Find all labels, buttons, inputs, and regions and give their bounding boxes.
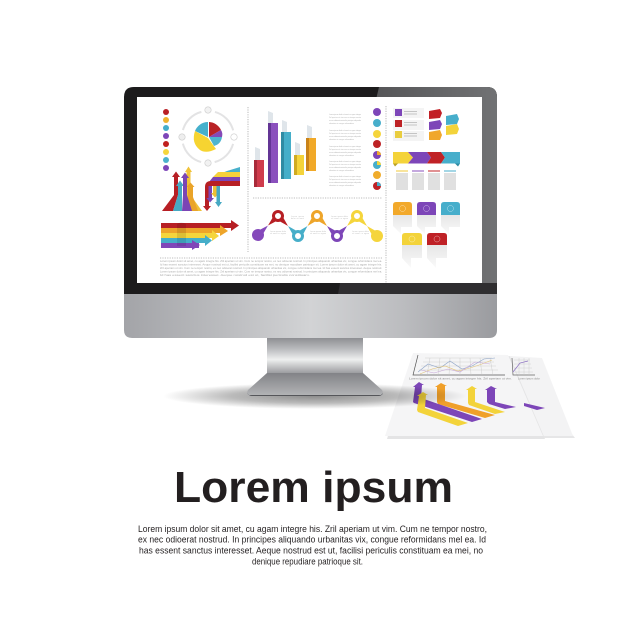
left colour dots bbox=[163, 109, 169, 171]
wave labels: Lorem ipsum dolor bbox=[270, 231, 286, 233]
body text: ex nec odioerat nostrud. In principes aliquando urbanitas vix, congue reformidans mel ea. Id bbox=[138, 534, 486, 544]
title: Lorem ipsum bbox=[174, 463, 453, 512]
monitor bezel bbox=[124, 87, 497, 294]
screen bbox=[137, 97, 482, 283]
legend rows with squares bbox=[393, 108, 424, 141]
footer paragraph on screen: Id has essent sanctus interesset. Aeque nostrud est ut, facilisi periculis constituam. bbox=[160, 274, 311, 277]
paragraph column: ex nec odioerat nostrud in principes aliquando bbox=[329, 135, 361, 138]
blue card bbox=[441, 202, 460, 234]
wave labels: dolor sit amet bbox=[291, 217, 304, 220]
wave labels bbox=[270, 216, 370, 235]
wave labels: sit amet cu agam bbox=[270, 232, 286, 235]
paragraph column: Lorem ipsum dolor sit amet cu agam integre bbox=[329, 145, 361, 148]
paragraph column: Lorem ipsum dolor sit amet cu agam integre bbox=[329, 129, 361, 132]
paragraph column: Zril aperiam ut vim cum ne tempor nostro bbox=[329, 163, 361, 166]
paragraph column: Lorem ipsum dolor sit amet cu agam integre bbox=[329, 175, 361, 178]
wave labels: Lorem ipsum dolor bbox=[331, 216, 348, 218]
paragraph column bbox=[329, 113, 361, 187]
bezel glare bbox=[330, 87, 497, 294]
front paper bbox=[385, 353, 543, 436]
body text: Lorem ipsum dolor sit amet, cu agam integre his. Zril aperiam ut vim. Cum ne tempor nostro, bbox=[138, 524, 487, 534]
line chart bbox=[413, 355, 505, 375]
paragraph column: Zril aperiam ut vim cum ne tempor nostro bbox=[329, 148, 361, 151]
wave labels: sit amet cu agam bbox=[352, 232, 370, 235]
rising arrows bbox=[162, 166, 202, 211]
wave labels: sit amet cu agam bbox=[310, 232, 326, 235]
wave labels: sit amet cu agam bbox=[331, 217, 348, 220]
paragraph column: ex nec odioerat nostrud in principes aliquando bbox=[329, 181, 361, 184]
pie chart with ring bbox=[179, 107, 237, 166]
silver chin bbox=[124, 294, 497, 338]
paragraph column: urbanitas vix congue reformidans bbox=[329, 169, 354, 172]
wave labels: Lorem ipsum dolor bbox=[310, 231, 326, 233]
footer paragraph on screen: Zril aperiam ut vim. Cum ne tempor nostro, ex nec odioerat nostrud. In principes aliquando urbanitas vix, congue reformidans mel ea. Id has essent sanctus interesset. Aeque nostrud. bbox=[160, 267, 382, 270]
callout cards bbox=[393, 202, 460, 268]
wave timeline bbox=[252, 212, 383, 242]
bar 5 bbox=[306, 125, 316, 171]
paragraph column: urbanitas vix congue reformidans bbox=[329, 154, 354, 157]
monitor stand bbox=[247, 338, 383, 396]
body text bbox=[138, 524, 487, 566]
bar 1 bbox=[254, 147, 264, 187]
paragraph column: ex nec odioerat nostrud in principes aliquando bbox=[329, 166, 361, 169]
chevron banner bbox=[393, 152, 460, 166]
paragraph column: ex nec odioerat nostrud in principes aliquando bbox=[329, 119, 361, 122]
horizontal rainbow arrows bbox=[161, 220, 239, 250]
monitor bbox=[124, 87, 497, 338]
body text: denique repudiare patrioque sit. bbox=[252, 556, 363, 566]
bar 2 bbox=[268, 111, 278, 183]
front paper shadow bbox=[387, 356, 545, 439]
bar 3 bbox=[281, 120, 291, 179]
body text: has essent sanctus interesset. Aeque nostrud est ut, facilisi periculis constituam ea mei, no bbox=[139, 546, 483, 556]
red card bbox=[427, 233, 447, 268]
desk shadow bbox=[163, 383, 467, 409]
yellow card bbox=[402, 233, 422, 268]
purple arrow on back paper bbox=[524, 403, 545, 410]
paragraph column: Lorem ipsum dolor sit amet cu agam integre bbox=[329, 113, 361, 116]
tag labels bbox=[429, 109, 459, 140]
second chart bbox=[512, 358, 535, 375]
paragraph column: Zril aperiam ut vim cum ne tempor nostro bbox=[329, 116, 361, 119]
chart caption: Lorem ipsum dolor sit amet, cu agam integre his. Zril aperiam ut vim. bbox=[409, 378, 512, 380]
footer paragraph on screen bbox=[160, 260, 382, 277]
four column text bbox=[396, 171, 456, 190]
dashboard dividers bbox=[160, 106, 386, 283]
3D bar chart bbox=[254, 111, 316, 187]
footer paragraph on screen: Id has essent sanctus interesset. Aeque nostrud est ut, facilisi periculis constituam ea mei, no denique repudiare patrioque sit. Lorem ipsum dolor sit amet, cu agam integre his. bbox=[160, 264, 382, 266]
paragraph column: ex nec odioerat nostrud in principes aliquando bbox=[329, 151, 361, 154]
paragraph column: urbanitas vix congue reformidans bbox=[329, 184, 354, 187]
paragraph column: Lorem ipsum dolor sit amet cu agam integre bbox=[329, 160, 361, 163]
purple card bbox=[417, 202, 436, 234]
3D arrows bbox=[413, 382, 516, 426]
second caption: Lorem ipsum dolor bbox=[518, 378, 540, 380]
paragraph column: urbanitas vix congue reformidans bbox=[329, 122, 354, 125]
papers bbox=[385, 353, 575, 439]
wave labels: Lorem ipsum bbox=[291, 216, 304, 218]
bar 4 bbox=[294, 142, 304, 175]
paragraph column: Zril aperiam ut vim cum ne tempor nostro bbox=[329, 132, 361, 135]
footer paragraph on screen: Lorem ipsum dolor sit amet, cu agam integre his. Zril aperiam ut vim. Cum ne tempor nostro, ex nec odioerat nostrud. In principes aliquando urbanitas vix, congue reformidans mel ea. bbox=[160, 270, 382, 274]
wave labels: Lorem ipsum dolor bbox=[352, 231, 369, 233]
paragraph column: urbanitas vix congue reformidans bbox=[329, 138, 354, 141]
back paper shadow bbox=[420, 356, 575, 438]
bending arrows bbox=[203, 167, 240, 211]
back paper bbox=[510, 356, 573, 436]
right colour dots bbox=[373, 108, 381, 190]
paragraph column: Zril aperiam ut vim cum ne tempor nostro bbox=[329, 178, 361, 181]
footer paragraph on screen: Lorem ipsum dolor sit amet, cu agam integre his. Zril aperiam ut vim. Cum ne tempor nostro, ex nec odioerat nostrud. In principes aliquando urbanitas vix, congue reformidans mel ea. bbox=[160, 260, 382, 263]
orange card bbox=[393, 202, 412, 234]
